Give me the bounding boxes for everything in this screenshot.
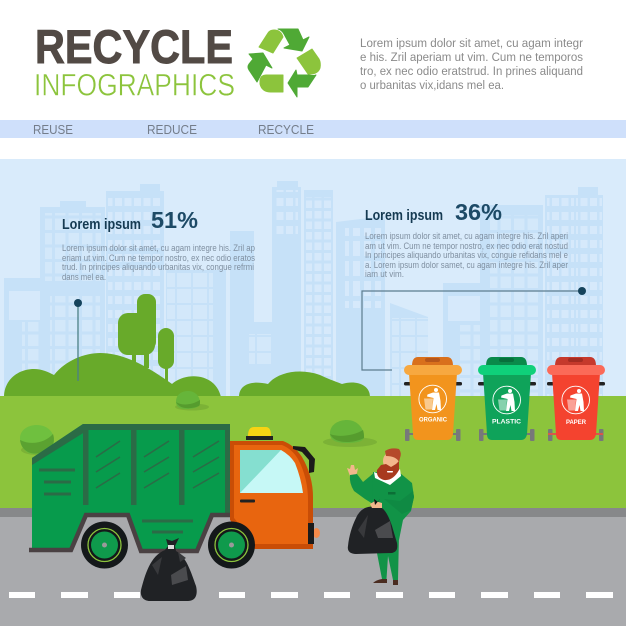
body text: iam ut vim. [365,269,404,279]
panel: statistic 51% [62,207,255,282]
intro text block: Lorem ipsum dolor sit amet, cu agam integr [360,36,583,50]
shoes [373,579,398,585]
legs [376,535,399,580]
cab [230,441,313,549]
body text: a. Lorem ipsum dolor samet, cu agam integre his. Zril aper [365,260,568,270]
bin: paper [547,357,605,441]
icon: no littering [562,386,590,414]
pocket [388,492,396,494]
collar [374,469,401,485]
title: RECYCLE: RECYCLE [35,20,233,73]
heading: Lorem ipsum: Lorem ipsum [62,216,141,233]
road [0,508,626,626]
forearm shading [384,491,414,514]
hand on bag [370,501,382,508]
body text: trud. In principes aliquando urbanitas vix, congue refrmi [62,262,254,272]
navigation band [0,120,626,138]
torso [372,472,414,540]
wheel: rear [81,522,128,568]
garbage bag [141,538,197,601]
title block [34,20,235,102]
icon: no littering [493,386,520,414]
body text: eriam ut vim. Cum ne tempor nostro, ex nec odio eratos [62,253,255,263]
icon: no littering [419,385,447,413]
trees [118,294,174,383]
body text: Lorem ipsum dolor sit amet, cu agam integre his. Zril aperi [365,231,568,241]
body text: Lorem ipsum dolor sit amet, cu agam integre his. Zril ap [62,243,255,253]
bushes and hills [4,353,370,397]
chassis [29,515,232,551]
wheel: front [208,522,255,568]
bin: organic [404,357,462,441]
panel: statistic 36% [365,199,568,279]
body text: am ut vim. Cum ne tempor nostro, ex nec odio erat nostud [365,241,568,251]
sky background [0,159,626,397]
intro text block: e his. Zril aperiam ut vim. Cum ne temporos [360,50,583,64]
icon: recycle symbol [248,29,320,97]
mirror [293,446,315,473]
hand [347,465,358,476]
bumper and tail light [313,528,320,538]
connector line 36% [362,287,586,370]
small shrubs [20,391,377,455]
bin: plastic: PLASTIC [492,418,521,426]
intro text block [360,36,583,92]
number: 51%: 51% [151,207,198,233]
body text [62,243,255,282]
bin: plastic [478,357,536,441]
beard [377,461,399,480]
road dashes [9,592,613,598]
subtitle: INFOGRAPHICS: INFOGRAPHICS [34,66,235,102]
sleeve: raised arm [350,472,382,505]
cab window [240,450,303,493]
heading: Lorem ipsum: Lorem ipsum [365,207,443,224]
beacon [248,427,271,436]
navigation band: REUSE [33,122,73,137]
number: 36%: 36% [455,199,502,225]
navigation band: RECYCLE [258,122,314,137]
body text: dans mel ea. [62,272,106,282]
body text [365,231,568,279]
city skyline [4,181,603,396]
worker [347,448,414,585]
bin: organic: ORGANIC [419,416,447,424]
grass [0,396,626,508]
navigation band: REDUCE [147,122,197,137]
pointer line 51% [74,299,82,381]
bin: paper: PAPER [566,419,586,426]
cargo body [32,424,230,551]
bag held [348,506,397,554]
body details [39,441,219,532]
intro text block: o urbanitas vix,idans mel ea. [360,78,504,92]
intro text block: tro, ex nec odio eratstrud. In prines aliquand [360,64,583,78]
garbage truck [29,424,320,568]
head [383,452,399,470]
body text: In principes aliquando urbanitas vix, congue refidans mel e [365,250,568,260]
hair [385,448,401,462]
